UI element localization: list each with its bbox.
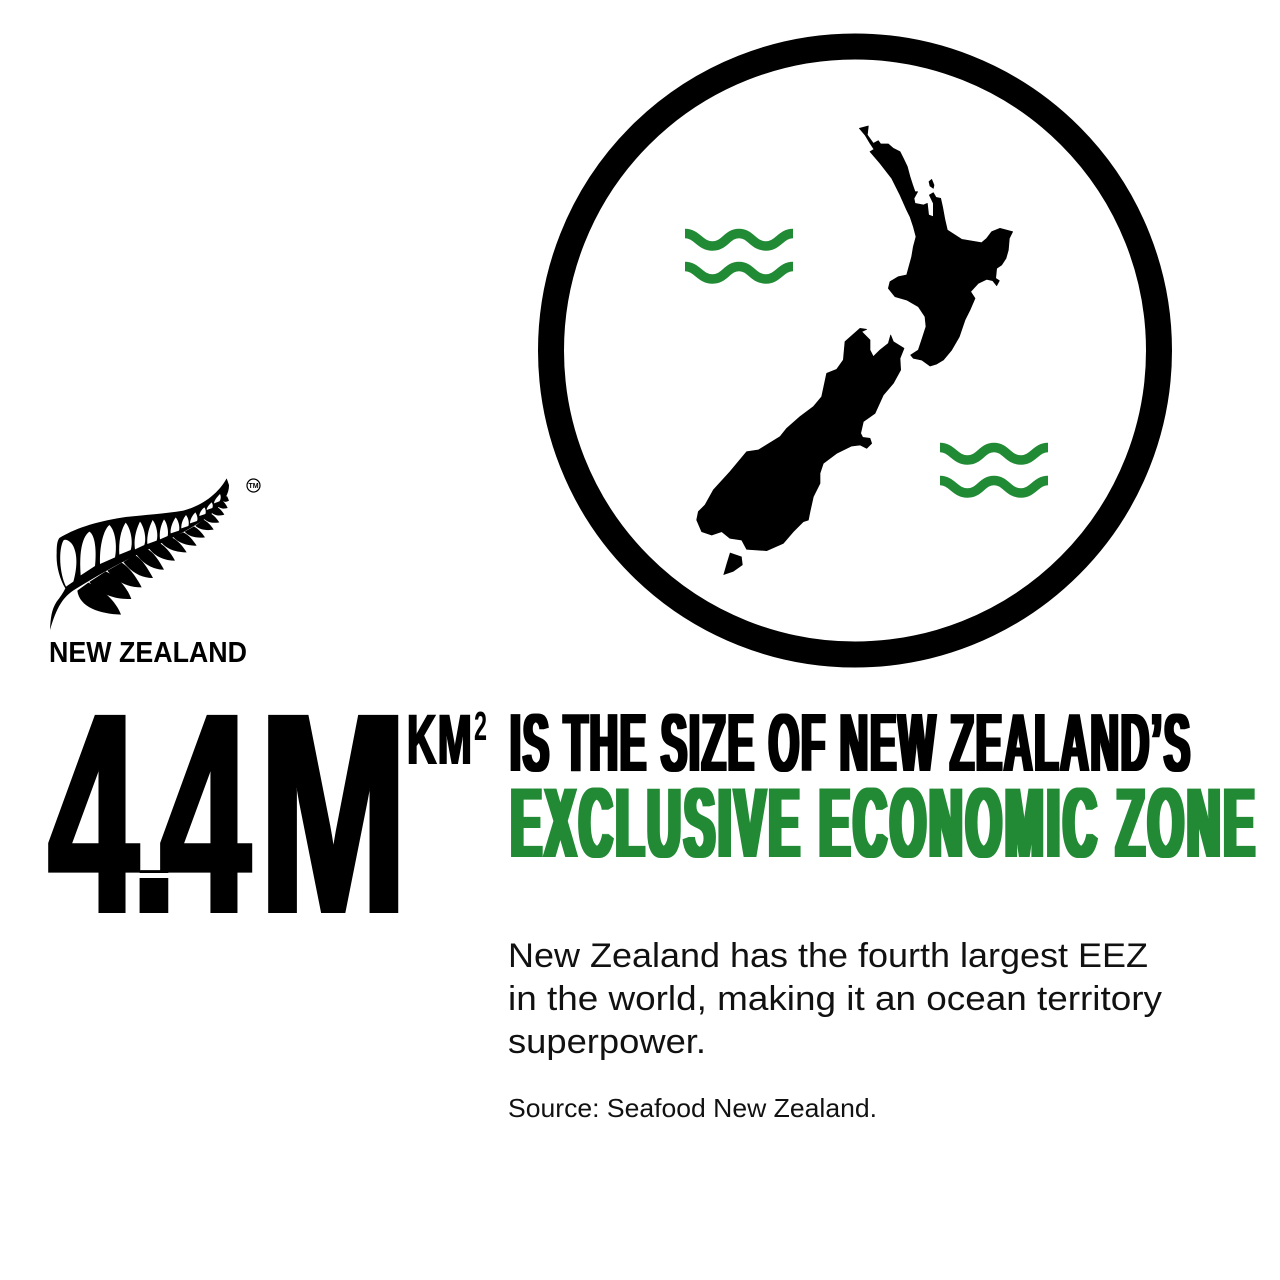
circle map illustration xyxy=(551,46,1159,654)
icon: waves lower right xyxy=(940,448,1048,493)
big statistic 4.4M: 4.4 xyxy=(49,654,250,975)
big statistic 4.4M: M xyxy=(259,652,407,974)
unit superscript 2: 2 xyxy=(474,703,487,749)
body paragraph: superpower. xyxy=(508,1023,706,1061)
unit KM: KM xyxy=(407,701,473,780)
trademark symbol: TM xyxy=(248,483,259,490)
trademark symbol xyxy=(247,479,260,492)
logo: New Zealand fern mark xyxy=(49,478,260,669)
black ring xyxy=(551,46,1159,654)
map: South Island xyxy=(697,328,904,551)
body paragraph xyxy=(508,937,1162,1061)
icon: waves upper left xyxy=(685,234,793,279)
big statistic 4.4M xyxy=(49,652,407,975)
source note: Source: Seafood New Zealand. xyxy=(508,1093,877,1123)
logo wordmark: NEW ZEALAND xyxy=(49,637,247,669)
map: North Island xyxy=(859,126,1013,366)
body paragraph: New Zealand has the fourth largest EEZ xyxy=(508,937,1148,975)
body paragraph: in the world, making it an ocean territory xyxy=(508,980,1162,1018)
map: Stewart Island xyxy=(723,553,743,575)
icon: silver fern xyxy=(50,478,229,630)
